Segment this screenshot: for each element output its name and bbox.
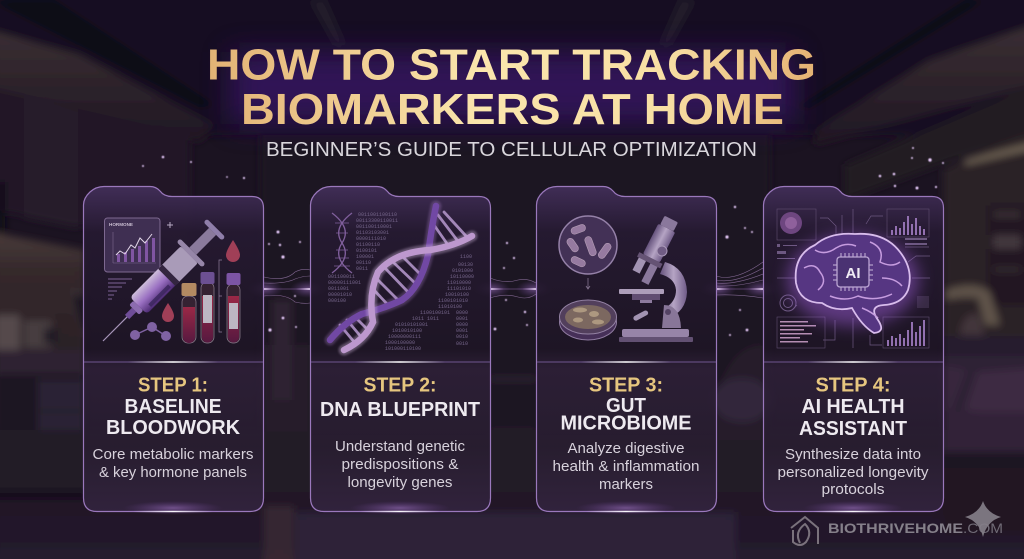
- divider: [537, 361, 716, 363]
- panel: step 3 gut microbiome: [536, 186, 716, 515]
- heading: [799, 396, 907, 440]
- icon: data list: [108, 279, 132, 299]
- watermark text: [828, 520, 1003, 536]
- icon: hormone chart: HORMONE: [109, 222, 133, 227]
- icon: syringe: [90, 215, 229, 354]
- description: health & inflammation: [552, 458, 700, 475]
- title glow backdrop: [230, 52, 795, 124]
- step label: STEP 1:: [138, 374, 208, 396]
- center wall: [260, 135, 770, 435]
- binary data right: 1100: [460, 254, 472, 260]
- icon: hormone chart: [104, 218, 160, 272]
- panel: step 4 ai health assistant: [764, 186, 944, 515]
- card frame: [764, 186, 944, 512]
- icon: main dna helix: [330, 206, 472, 350]
- floor: [0, 490, 1024, 559]
- binary data right: 1011 1011: [412, 316, 439, 322]
- watermark text: .COM: [963, 520, 1003, 536]
- binary data right: 0010: [456, 341, 468, 347]
- description: Analyze digestive: [568, 440, 684, 457]
- left upper cabinets: [0, 88, 190, 245]
- right wall: [943, 125, 1024, 340]
- description: Synthesize data into: [785, 446, 921, 463]
- binary data left: 0000111010: [356, 236, 386, 242]
- heading: AI HEALTH: [802, 396, 904, 418]
- icon: blood drops: [162, 240, 240, 322]
- divider: [764, 361, 943, 363]
- bottom glow: [350, 501, 450, 515]
- description: protocols: [822, 481, 884, 498]
- binary data right: 10010100: [445, 292, 469, 298]
- binary data left: 01100110: [356, 242, 380, 248]
- decor object on shelf: [946, 285, 1000, 325]
- icon: radar circle: [780, 295, 796, 311]
- ceiling panels: [0, 0, 1024, 135]
- binary data left: 00001010: [328, 292, 352, 298]
- icon: blood tube 3: [226, 273, 240, 343]
- icon: ai brain: [787, 234, 919, 333]
- binary data left: 000100: [328, 298, 346, 304]
- binary data left: 0011001: [328, 286, 349, 292]
- binary data right: 1100101010: [438, 298, 468, 304]
- icon: bottom left list: [777, 317, 825, 348]
- binary data right: 1000100000: [385, 340, 415, 346]
- description: predispositions &: [342, 456, 458, 473]
- connector: step 1 to step 2: [247, 269, 326, 303]
- card frame: [84, 186, 264, 512]
- icon: magnified bacteria: [559, 216, 617, 274]
- step label: STEP 3:: [589, 374, 663, 396]
- binary data left: 00110: [356, 260, 371, 266]
- description: Understand genetic: [335, 438, 465, 455]
- sofa: [943, 356, 1024, 468]
- binary data right: 101000110100: [385, 346, 421, 352]
- binary data left: 0011: [356, 266, 368, 272]
- divider: [311, 361, 490, 363]
- panel: step 1 baseline bloodwork: [84, 186, 264, 515]
- icon: bottom right chart: [883, 317, 929, 348]
- binary data left: 0100101: [356, 248, 377, 254]
- description: & key hormone panels: [99, 464, 247, 481]
- description: personalized longevity: [778, 464, 929, 481]
- card frame: [310, 186, 490, 512]
- binary data right: 0101000: [452, 268, 473, 274]
- bottom glow: [803, 501, 903, 515]
- icon: cell scan panel: [777, 209, 816, 240]
- lounge chair behind card 3 and 4: [716, 345, 763, 440]
- card frame: [536, 186, 716, 512]
- step label: STEP 4:: [816, 374, 890, 396]
- binary data right: 0000: [456, 310, 468, 316]
- binary data right: 11101010: [447, 286, 471, 292]
- bottom glow: [123, 501, 223, 515]
- backsplash with under cabinet light: [0, 232, 85, 355]
- title: BIOMARKERS AT HOME: [241, 85, 784, 134]
- binary data right: [385, 254, 474, 352]
- description: [778, 446, 929, 498]
- binary data left: 001100011: [328, 274, 355, 280]
- icon: ai brain: AI: [846, 265, 860, 282]
- description: longevity genes: [348, 474, 452, 491]
- binary data right: 0010: [456, 334, 468, 340]
- heading: [106, 396, 241, 439]
- icon: top right chart: [887, 209, 929, 237]
- binary data right: 10110000: [450, 274, 474, 280]
- heading: [560, 395, 692, 434]
- connector: step 2 to step 3: [474, 278, 552, 298]
- heading: BLOODWORK: [106, 417, 241, 439]
- binary data right: 01010101001: [395, 322, 428, 328]
- icon: petri dish: [560, 300, 616, 340]
- binary data right: 10000000111: [388, 334, 421, 340]
- description: Core metabolic markers: [92, 446, 254, 463]
- binary data right: 11010100: [438, 304, 462, 310]
- title: [207, 40, 816, 134]
- icon: blood tube 1: [182, 283, 196, 343]
- icon: data readouts: [777, 238, 929, 308]
- binary data left: 0011001100110: [358, 212, 397, 218]
- description: [552, 440, 700, 493]
- background sparkles: [142, 147, 944, 336]
- binary data left: 001100110001: [356, 224, 392, 230]
- panel: step 2 dna blueprint: [310, 186, 490, 515]
- watermark text: BIOTHRIVEHOME: [828, 520, 963, 536]
- binary data left: 100001: [356, 254, 374, 260]
- icon: bracket: [219, 260, 222, 332]
- subtitle: BEGINNER’S GUIDE TO CELLULAR OPTIMIZATION: [266, 139, 757, 161]
- binary data right: 0001: [456, 316, 468, 322]
- icon: blood tube 2: [200, 272, 214, 343]
- binary data left: 00113300110011: [356, 218, 398, 224]
- binary data right: 0001: [456, 328, 468, 334]
- heading: MICROBIOME: [560, 412, 692, 434]
- binary data right: 1100100101: [420, 310, 450, 316]
- binary data right: 0000: [456, 322, 468, 328]
- description: [335, 438, 465, 491]
- icon: circuit traces: [777, 209, 930, 348]
- icon: plus: [167, 222, 173, 228]
- bottom glow: [576, 501, 676, 515]
- binary data right: 1010010100: [392, 328, 422, 334]
- binary data right: 11010000: [447, 280, 471, 286]
- binary data left: 00000111001: [328, 280, 361, 286]
- binary data left: 01103103001: [356, 230, 389, 236]
- counter equipment: [0, 315, 20, 351]
- icon: molecule: [130, 322, 170, 340]
- connector: step 3 to step 4: [700, 262, 779, 298]
- binary data right: 00130: [458, 262, 473, 268]
- binary data left: [328, 212, 398, 304]
- description: markers: [599, 476, 653, 493]
- icon: arrow down: [586, 278, 590, 289]
- title: HOW TO START TRACKING: [207, 40, 816, 90]
- divider: [84, 361, 263, 363]
- icon: microscope: [619, 213, 693, 342]
- counter and base drawers: [0, 350, 85, 374]
- heading: GUT: [606, 395, 646, 417]
- heading: DNA BLUEPRINT: [320, 399, 480, 421]
- icon: watermark house logo: [791, 517, 818, 545]
- heading: BASELINE: [124, 396, 222, 418]
- heading: ASSISTANT: [799, 418, 907, 440]
- description: [92, 446, 254, 481]
- step label: STEP 2:: [364, 374, 436, 396]
- icon: sparkle watermark: [965, 501, 1001, 537]
- icon: small dna helix: [332, 213, 352, 273]
